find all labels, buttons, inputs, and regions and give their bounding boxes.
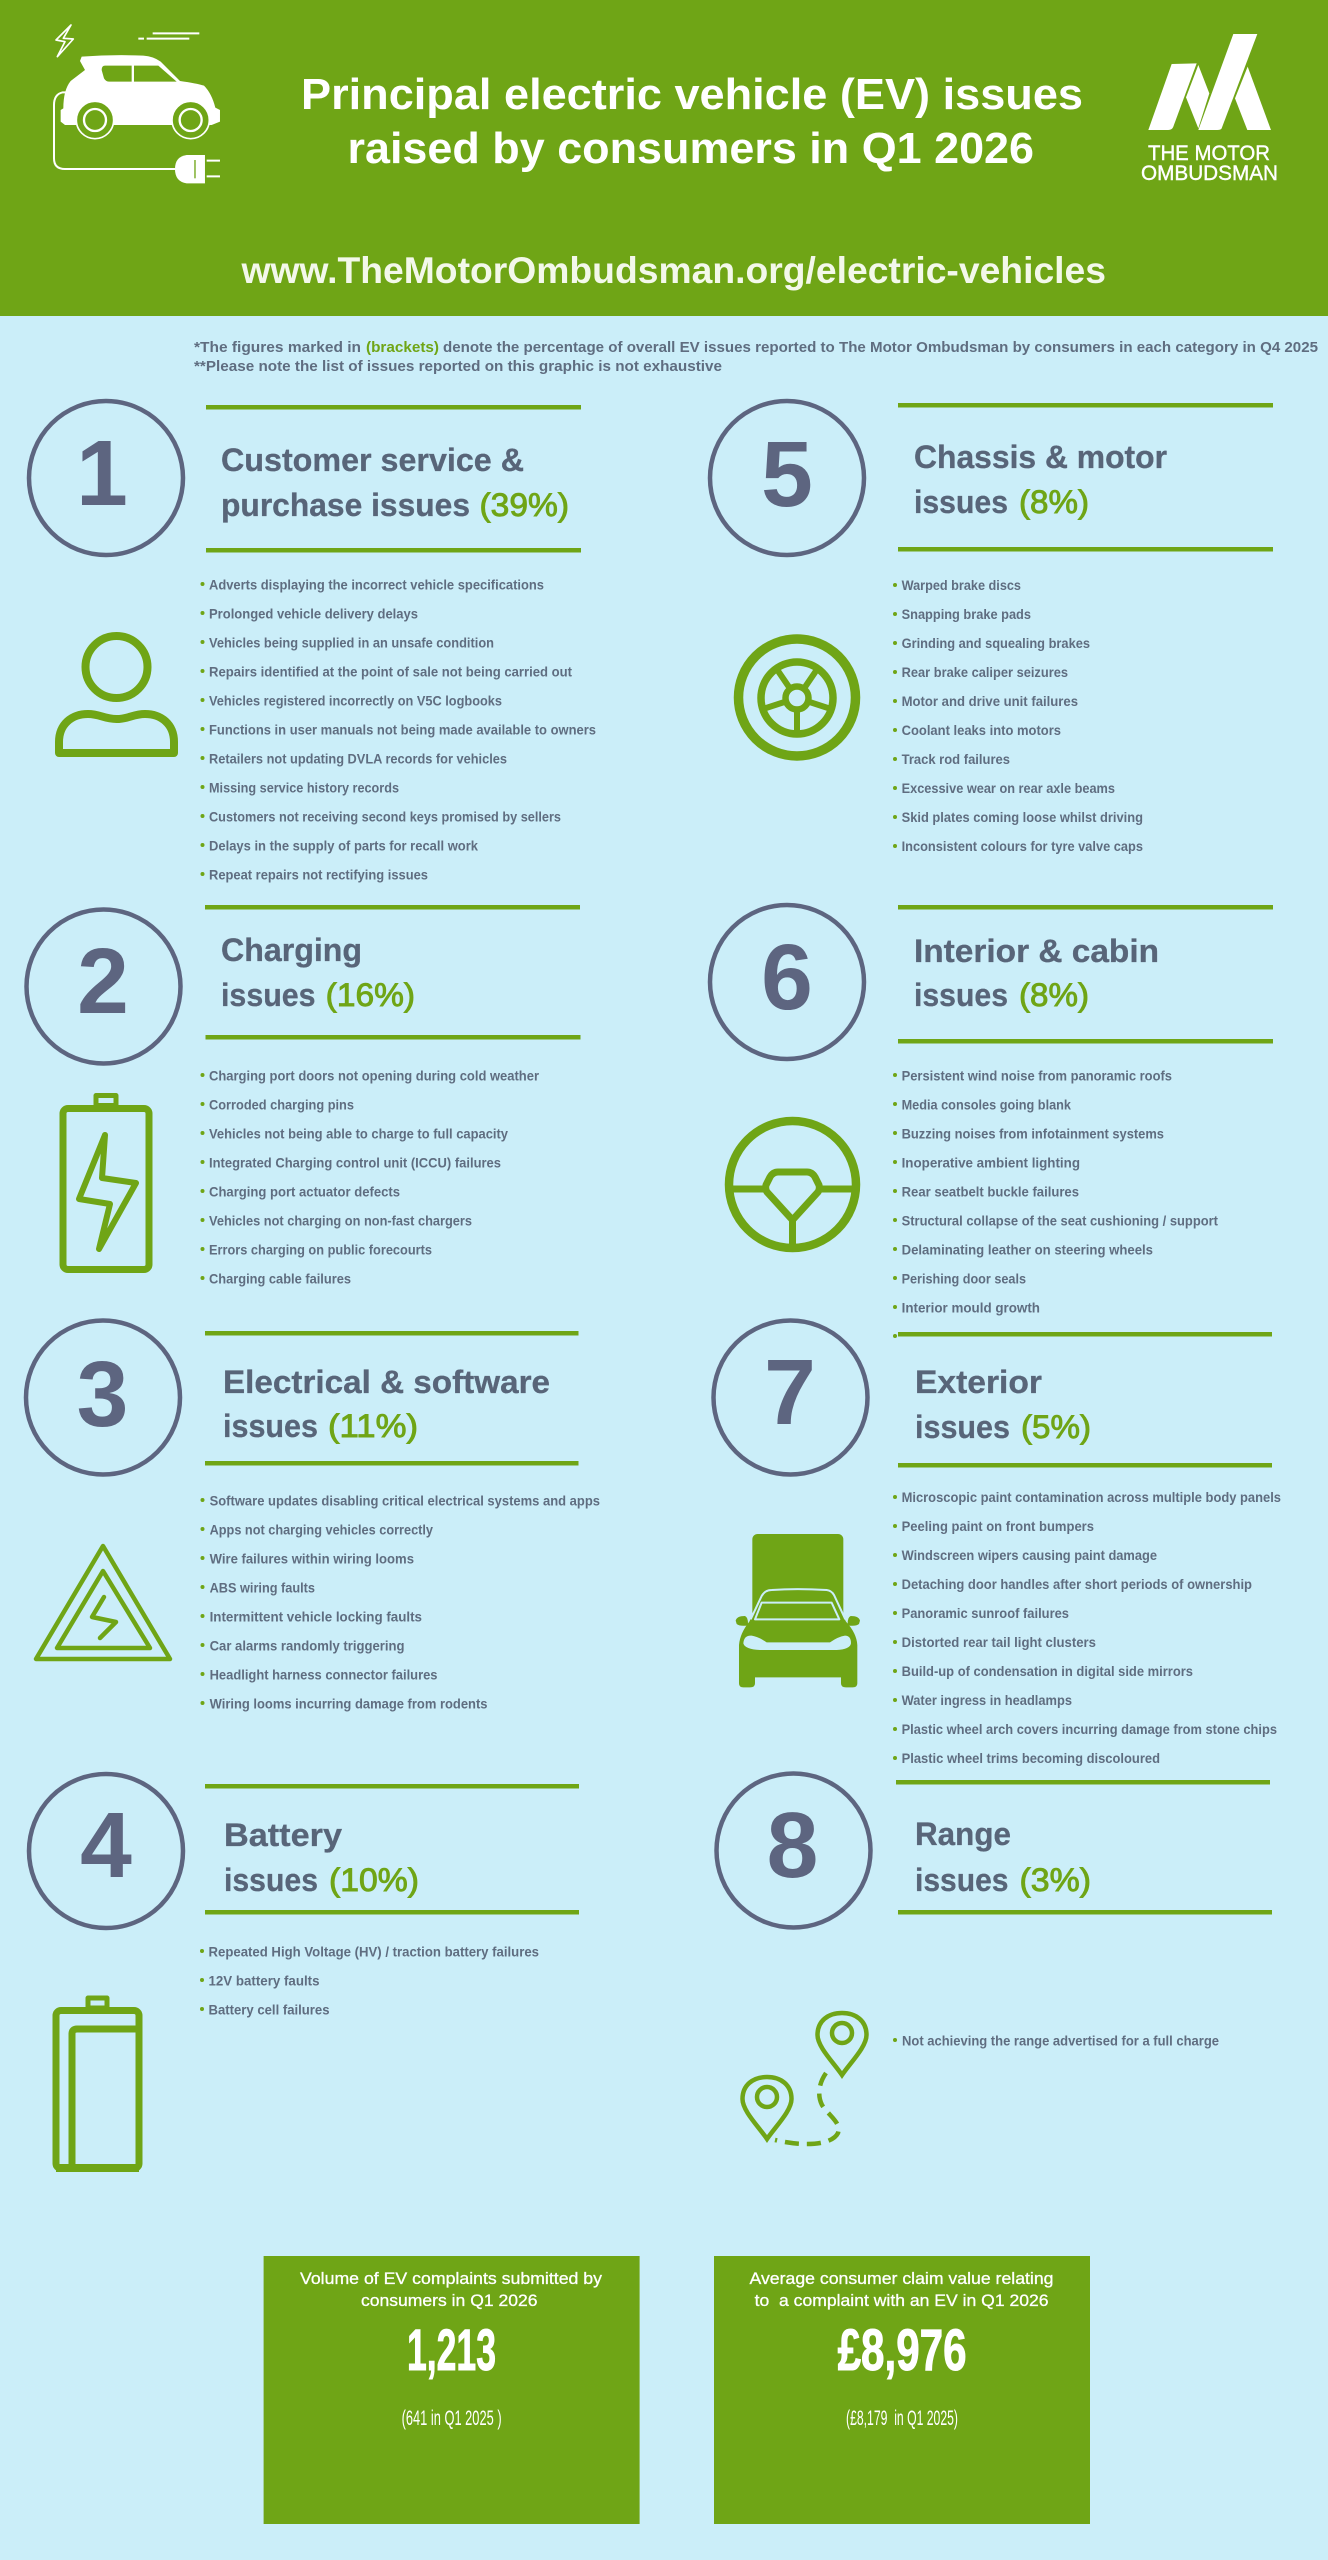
number badge 3 <box>26 1320 180 1474</box>
issue list: Media consoles going blank <box>902 1096 1071 1112</box>
heading: issues <box>915 1862 1008 1898</box>
stat card: average claim value: (£8,179 in Q1 2025) <box>846 2407 958 2430</box>
website url: www.TheMotorOmbudsman.org/electric-vehicles <box>240 250 1106 291</box>
issue list: Build-up of condensation in digital side mirrors <box>902 1663 1193 1679</box>
issue list: Panoramic sunroof failures <box>902 1605 1069 1621</box>
issue list: Water ingress in headlamps <box>902 1692 1072 1708</box>
heading: Exterior <box>915 1364 1042 1400</box>
issue list: Corroded charging pins <box>209 1096 354 1112</box>
issue list <box>893 1068 1218 1338</box>
logo: The Motor Ombudsman: OMBUDSMAN <box>1141 162 1278 185</box>
number badge 4 <box>29 1774 183 1928</box>
stat card: volume of complaints: consumers in Q1 2026 <box>361 2291 538 2310</box>
heading: issues <box>224 1862 318 1898</box>
issue list: Car alarms randomly triggering <box>210 1638 404 1654</box>
icon: car with raised bonnet <box>736 1534 860 1687</box>
issue list: Charging port actuator defects <box>209 1184 400 1200</box>
number badge 8 <box>716 1774 870 1928</box>
icon: battery with lightning bolt <box>63 1096 149 1270</box>
issue list: Adverts displaying the incorrect vehicle specifications <box>209 576 544 592</box>
heading: Battery <box>224 1817 342 1853</box>
issue list: Skid plates coming loose whilst driving <box>902 809 1143 825</box>
issue list: Interior mould growth <box>902 1300 1040 1316</box>
number badge 2: 2 <box>77 929 129 1033</box>
heading <box>915 1364 1091 1445</box>
panel: 2 charging issues <box>26 905 580 1286</box>
issue list: Rear seatbelt buckle failures <box>902 1184 1079 1200</box>
icon: steering wheel <box>729 1121 856 1248</box>
heading: (3%) <box>1020 1862 1091 1898</box>
issue list: Delaminating leather on steering wheels <box>902 1242 1153 1258</box>
number badge 6: 6 <box>761 925 813 1029</box>
issue list: Motor and drive unit failures <box>902 693 1078 709</box>
heading: issues <box>915 1409 1010 1445</box>
stat card: average claim value: Average consumer claim value relating <box>750 2269 1054 2288</box>
heading: (8%) <box>1019 977 1089 1013</box>
issue list: Not achieving the range advertised for a full charge <box>902 2032 1219 2048</box>
heading: Range <box>915 1816 1011 1852</box>
issue list: Intermittent vehicle locking faults <box>210 1608 422 1624</box>
issue list: Vehicles registered incorrectly on V5C logbooks <box>209 692 502 708</box>
issue list: Battery cell failures <box>208 2002 330 2018</box>
issue list: Apps not charging vehicles correctly <box>210 1522 433 1538</box>
stat card: volume of complaints: Volume of EV complaints submitted by <box>300 2269 603 2288</box>
heading: purchase issues <box>221 487 470 523</box>
issue list: Delays in the supply of parts for recall work <box>209 838 478 854</box>
issue list <box>200 1068 540 1286</box>
issue list: Functions in user manuals not being made available to owners <box>209 722 596 738</box>
issue list: Plastic wheel arch covers incurring damage from stone chips <box>902 1721 1277 1737</box>
issue list: Headlight harness connector failures <box>210 1666 438 1682</box>
heading: (10%) <box>329 1862 419 1898</box>
icon: battery <box>56 1998 139 2169</box>
issue list: Warped brake discs <box>902 577 1021 593</box>
issue list: Structural collapse of the seat cushioning / support <box>902 1212 1218 1228</box>
panel: 7 exterior issues <box>714 1320 1281 1766</box>
issue list: Plastic wheel trims becoming discoloured <box>902 1750 1160 1766</box>
number badge 1: 1 <box>76 421 128 525</box>
stat card: volume of complaints <box>264 2256 640 2524</box>
issue list <box>200 1492 600 1712</box>
heading: (16%) <box>326 977 415 1013</box>
heading: issues <box>914 977 1008 1013</box>
heading: Customer service & <box>221 442 524 478</box>
stat card: volume of complaints: 1,213 <box>407 2318 496 2383</box>
title: Principal electric vehicle (EV) issues <box>301 70 1083 119</box>
footnotes: **Please note the list of issues reported on this graphic is not exhaustive <box>194 359 722 375</box>
icon: wheel <box>738 639 856 756</box>
heading <box>914 933 1159 1013</box>
number badge 7: 7 <box>764 1340 816 1444</box>
heading <box>914 439 1167 520</box>
heading <box>224 1817 419 1898</box>
number badge 1 <box>29 401 183 555</box>
heading: issues <box>221 977 316 1013</box>
issue list: Charging port doors not opening during cold weather <box>209 1068 540 1084</box>
issue list: Vehicles not charging on non-fast chargers <box>209 1212 472 1228</box>
panel: 4 battery issues <box>29 1774 579 2169</box>
stat card: average claim value: £8,976 <box>838 2318 967 2383</box>
panel: header banner <box>0 0 1328 316</box>
issue list: Repairs identified at the point of sale not being carried out <box>209 664 572 680</box>
icon: person <box>59 636 174 753</box>
issue list: Buzzing noises from infotainment systems <box>902 1126 1164 1142</box>
heading <box>915 1816 1091 1898</box>
issue list: Repeated High Voltage (HV) / traction battery failures <box>208 1944 539 1960</box>
issue list: Repeat repairs not rectifying issues <box>209 866 428 882</box>
panel: 8 range issues <box>716 1774 1272 2144</box>
issue list <box>200 576 596 882</box>
icon: route between map pins <box>742 2013 866 2144</box>
issue list: Distorted rear tail light clusters <box>902 1634 1096 1650</box>
issue list: Track rod failures <box>902 751 1010 767</box>
number badge 6 <box>710 905 864 1059</box>
heading: (8%) <box>1019 484 1089 520</box>
heading: Charging <box>221 932 362 968</box>
heading: Electrical & software <box>223 1364 550 1400</box>
heading: (39%) <box>480 487 569 523</box>
issue list: Peeling paint on front bumpers <box>902 1518 1094 1534</box>
heading: (5%) <box>1021 1409 1091 1445</box>
issue list: 12V battery faults <box>208 1972 320 1988</box>
panel: 5 chassis and motor issues <box>710 401 1273 854</box>
footnotes: (brackets) <box>366 340 439 356</box>
issue list: Missing service history records <box>209 780 399 796</box>
issue list: Errors charging on public forecourts <box>209 1242 432 1258</box>
issue list: Rear brake caliper seizures <box>902 664 1068 680</box>
number badge 3: 3 <box>77 1342 128 1446</box>
number badge 5 <box>710 401 864 555</box>
number badge 4: 4 <box>80 1793 132 1897</box>
issue list: Microscopic paint contamination across multiple body panels <box>902 1489 1281 1505</box>
heading: Interior & cabin <box>914 933 1159 969</box>
issue list: ABS wiring faults <box>210 1580 315 1596</box>
number badge 2 <box>26 910 180 1064</box>
issue list: Perishing door seals <box>902 1270 1026 1286</box>
heading <box>221 932 415 1013</box>
panel: 3 electrical and software issues <box>26 1320 600 1712</box>
heading: issues <box>223 1408 318 1444</box>
heading: (11%) <box>328 1408 418 1444</box>
heading: Chassis & motor <box>914 439 1167 475</box>
logo: The Motor Ombudsman <box>1141 34 1278 185</box>
issue list: Excessive wear on rear axle beams <box>902 780 1115 796</box>
issue list: Wire failures within wiring looms <box>210 1550 414 1566</box>
issue list: Integrated Charging control unit (ICCU) failures <box>209 1154 501 1170</box>
issue list: Coolant leaks into motors <box>902 722 1061 738</box>
logo: The Motor Ombudsman: THE MOTOR <box>1148 142 1270 165</box>
footnotes <box>194 340 1318 375</box>
issue list: Charging cable failures <box>209 1270 351 1286</box>
issue list: Inconsistent colours for tyre valve caps <box>902 838 1143 854</box>
stat card: volume of complaints: (641 in Q1 2025 ) <box>402 2407 502 2430</box>
heading: issues <box>914 484 1008 520</box>
issue list: Snapping brake pads <box>902 606 1031 622</box>
issue list <box>893 1489 1281 1766</box>
panel: 1 customer service and purchase issues <box>29 401 596 882</box>
icon: electrical warning triangle <box>36 1546 170 1659</box>
issue list: Wiring looms incurring damage from rodents <box>210 1696 488 1712</box>
title <box>301 70 1083 173</box>
stat card: average claim value <box>714 2256 1090 2524</box>
panel: 6 interior and cabin issues <box>710 905 1273 1338</box>
icon: electric car with charging plug <box>54 25 220 183</box>
footnotes: *The figures marked in <box>194 340 361 356</box>
issue list: Persistent wind noise from panoramic roofs <box>902 1068 1172 1084</box>
issue list: Customers not receiving second keys promised by sellers <box>209 808 561 824</box>
issue list: Prolonged vehicle delivery delays <box>209 606 418 622</box>
issue list: Grinding and squealing brakes <box>902 635 1090 651</box>
issue list: Inoperative ambient lighting <box>902 1154 1080 1170</box>
number badge 7 <box>714 1320 868 1474</box>
issue list <box>200 1944 539 2018</box>
issue list: Vehicles not being able to charge to full capacity <box>209 1126 508 1142</box>
issue list: Software updates disabling critical electrical systems and apps <box>210 1492 600 1508</box>
heading <box>223 1364 550 1444</box>
stat card: average claim value: to a complaint with an EV in Q1 2026 <box>755 2291 1049 2310</box>
issue list: Retailers not updating DVLA records for vehicles <box>209 750 507 766</box>
issue list: Windscreen wipers causing paint damage <box>902 1547 1157 1563</box>
issue list: Detaching door handles after short periods of ownership <box>902 1576 1252 1592</box>
issue list: Vehicles being supplied in an unsafe condition <box>209 634 494 650</box>
heading <box>221 442 569 523</box>
number badge 5: 5 <box>761 422 813 526</box>
title: raised by consumers in Q1 2026 <box>348 124 1034 173</box>
footnotes: denote the percentage of overall EV issues reported to The Motor Ombudsman by consumers in each category in Q4 2025 <box>443 340 1318 356</box>
number badge 8: 8 <box>767 1793 818 1897</box>
issue list <box>893 577 1143 854</box>
